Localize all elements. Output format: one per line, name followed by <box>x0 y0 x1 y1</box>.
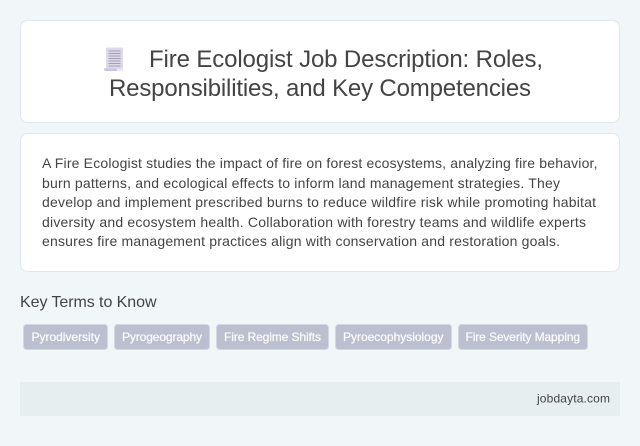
tag: Pyrogeography <box>114 324 210 350</box>
title: Responsibilities, and Key Competencies <box>109 75 531 102</box>
description text: A Fire Ecologist studies the impact of fire on forest ecosystems, analyzing fire behavior, <box>42 155 598 171</box>
panel: title card <box>20 20 620 122</box>
tag: Pyrogeography: Pyrogeography <box>122 330 202 344</box>
tag: Pyrodiversity <box>24 324 108 350</box>
description text: diversity and ecosystem health. Collaboration with forestry teams and wildlife experts <box>42 214 586 230</box>
tag: Fire Regime Shifts: Fire Regime Shifts <box>224 330 321 344</box>
tag: Fire Severity Mapping: Fire Severity Mapping <box>466 330 580 344</box>
description text: develop and implement prescribed burns to reduce wildfire risk while promoting habitat <box>42 194 596 210</box>
tag: Pyroecophysiology <box>336 324 452 350</box>
icon: document scroll <box>104 48 123 71</box>
key term tags <box>24 324 588 350</box>
panel: description card <box>20 134 620 272</box>
tag: Pyrodiversity: Pyrodiversity <box>32 330 100 344</box>
tag: Fire Regime Shifts <box>216 324 328 350</box>
description text: burn patterns, and ecological effects to inform land management strategies. They <box>42 175 560 191</box>
title <box>109 46 543 102</box>
title: Fire Ecologist Job Description: Roles, <box>149 46 543 73</box>
heading: key terms: Key Terms to Know <box>20 294 157 311</box>
description text <box>42 155 598 249</box>
description text: ensures fire management practices align with conservation and restoration goals. <box>42 233 560 249</box>
footer bar <box>20 382 620 416</box>
footer source text: jobdayta.com <box>536 392 610 406</box>
tag: Fire Severity Mapping <box>458 324 588 350</box>
tag: Pyroecophysiology: Pyroecophysiology <box>343 330 444 344</box>
